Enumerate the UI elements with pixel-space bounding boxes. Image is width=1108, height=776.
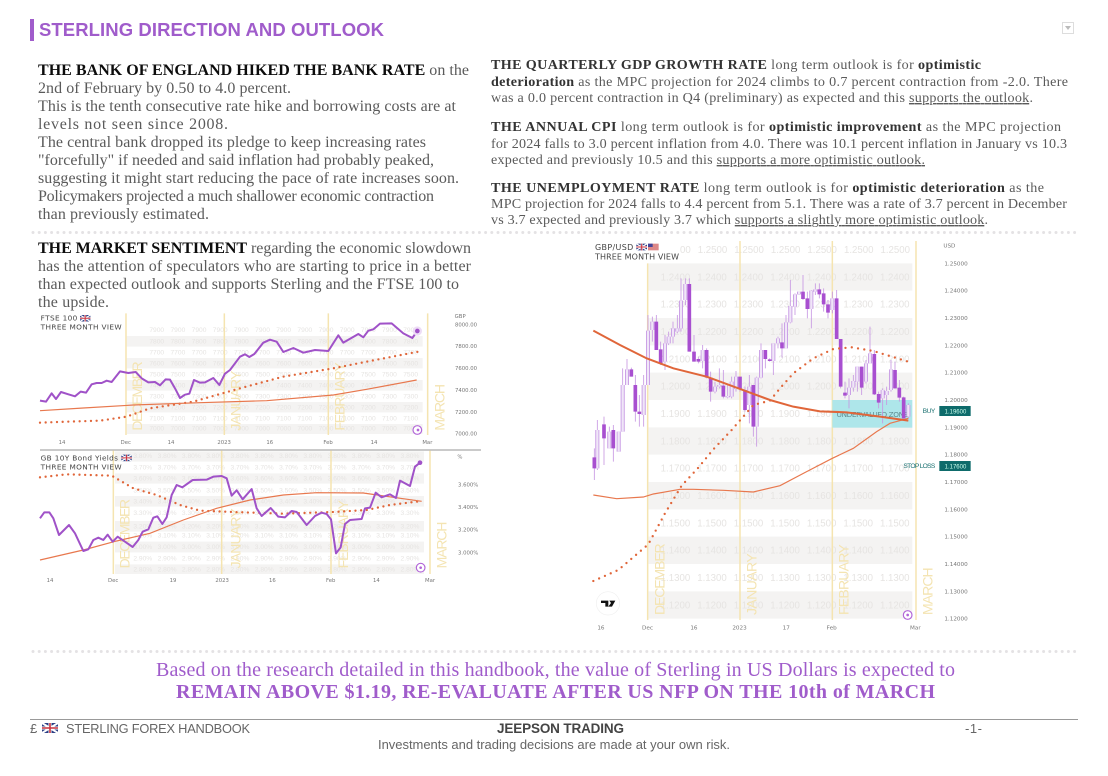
- chart: GB 10Y bond yields: %: [457, 455, 462, 461]
- chart: GBP/USD candlesticks: 1.1700 1.1700 1.1700 1.1700 1.1700 1.1700 1.1700: [661, 464, 910, 475]
- chart: FTSE 100: 14: [59, 440, 66, 446]
- chart: GB 10Y bond yields: 14: [373, 578, 380, 584]
- text block: bank of england: Policymakers projected a much shallower economic contraction: [38, 188, 434, 205]
- text block: bank of england: levels not seen since 2008.: [38, 116, 228, 133]
- chart: GB 10Y bond yields: 3.80% 3.80% 3.80% 3.80% 3.80% 3.80% 3.80% 3.80% 3.80% 3.80% 3.80% 3.80%: [133, 453, 419, 460]
- chart: GBP/USD candlesticks: FEBRUARY: [835, 544, 851, 615]
- chart: GBP/USD candlesticks: Mar: [910, 625, 921, 631]
- chart: FTSE 100: [40, 313, 478, 446]
- chart: GBP/USD candlesticks: 17: [783, 625, 790, 631]
- chart: GB 10Y bond yields: JANUARY: [228, 508, 244, 568]
- chart: GBP/USD candlesticks: 2023: [732, 625, 747, 631]
- chart: FTSE 100: Dec: [121, 440, 131, 446]
- text block: bank of england: than previously estimated.: [38, 206, 209, 223]
- chart: GB 10Y bond yields: 2.80% 2.80% 2.80% 2.80% 2.80% 2.80% 2.80% 2.80% 2.80% 2.80% 2.80% 2.80%: [133, 567, 419, 574]
- chart: GB 10Y bond yields: 3.000%: [458, 551, 478, 557]
- chart: GB 10Y bond yields: 2023: [215, 578, 229, 584]
- undervalued zone: [832, 400, 912, 428]
- chart: GBP/USD candlesticks: 1.2200 1.2200 1.2200 1.2200 1.2200 1.2200 1.2200: [661, 327, 910, 338]
- chart: GB 10Y bond yields: 14: [47, 578, 54, 584]
- chart: FTSE 100: Mar: [422, 440, 433, 446]
- text block: quarterly GDP: deterioration as the MPC projection for 2024 climbs to 0.7 percent contraction from -2.0. There: [491, 74, 1068, 90]
- chart: FTSE 100: FTSE 100: [41, 314, 78, 323]
- chart: FTSE 100: 16: [266, 440, 274, 446]
- text block: annual CPI: [491, 119, 1067, 168]
- chart: GB 10Y bond yields: 2.90% 2.90% 2.90% 2.90% 2.90% 2.90% 2.90% 2.90% 2.90% 2.90% 2.90% 2.90%: [133, 556, 419, 563]
- chart: GBP/USD candlesticks: 1.18000: [944, 453, 968, 459]
- footer: Investments and trading decisions are made at your own risk.: [378, 737, 730, 752]
- buy level: 1.19600: [945, 409, 967, 415]
- moving averages: [593, 331, 908, 581]
- chart: GB 10Y bond yields: 3.20% 3.20% 3.20% 3.20% 3.20% 3.20% 3.20% 3.20% 3.20% 3.20% 3.20% 3.20%: [133, 524, 419, 531]
- chart: GBP/USD candlesticks: USD: [943, 244, 956, 250]
- chart: GBP/USD candlesticks: 1.2000 1.2000 1.2000 1.2000 1.2000 1.2000 1.2000: [661, 382, 910, 393]
- chart: GBP/USD candlesticks: 1.22000: [944, 343, 968, 349]
- chart: GB 10Y bond yields: [40, 451, 478, 584]
- chart: GB 10Y bond yields: 19: [170, 578, 177, 584]
- chart: GB 10Y bond yields: 3.600%: [458, 483, 478, 489]
- candlesticks: [594, 275, 908, 480]
- footer: -1-: [965, 721, 982, 736]
- chart: FTSE 100: 7300 7300 7300 7300 7300 7300 7300 7300 7300 7300 7300 7300 7300: [149, 393, 418, 400]
- text block: unemployment rate: MPC projection for 2024 falls to 4.4 percent from 5.1. There was a rate of 3.7 percent in December: [491, 196, 1067, 212]
- stop loss level: STOP LOSS: [903, 463, 936, 470]
- text block: quarterly GDP: [491, 57, 1068, 106]
- chart: GBP/USD candlesticks: Dec: [642, 625, 653, 631]
- chart: FTSE 100: 7200 7200 7200 7200 7200 7200 7200 7200 7200 7200 7200 7200 7200: [149, 404, 418, 411]
- chart: FTSE 100: JANUARY: [228, 370, 244, 431]
- chart: FTSE 100: 7900 7900 7900 7900 7900 7900 7900 7900 7900 7900 7900 7900 7900: [149, 327, 418, 334]
- chart: GBP/USD candlesticks: 1.21000: [944, 371, 968, 377]
- chart: FTSE 100: 7600 7600 7600 7600 7600 7600 7600 7600 7600 7600 7600 7600 7600: [149, 360, 418, 367]
- chart: GB 10Y bond yields: Feb: [326, 578, 336, 584]
- chart: FTSE 100: 8000.00: [455, 322, 478, 328]
- chart: GBP/USD candlesticks: 1.17000: [944, 480, 968, 486]
- chart: GBP/USD candlesticks: MARCH: [920, 567, 936, 615]
- chart: GBP/USD candlesticks: GBP/USD: [595, 243, 633, 252]
- text block: market sentiment: the upside.: [38, 294, 109, 311]
- chart: GBP/USD candlesticks: 1.19000: [944, 425, 968, 431]
- chart: FTSE 100: 7800 7800 7800 7800 7800 7800 7800 7800 7800 7800 7800 7800 7800: [149, 338, 418, 345]
- chart: GB 10Y bond yields: 3.70% 3.70% 3.70% 3.70% 3.70% 3.70% 3.70% 3.70% 3.70% 3.70% 3.70% 3.70%: [133, 465, 419, 472]
- chart: GBP/USD candlesticks: 1.1600 1.1600 1.1600 1.1600 1.1600 1.1600 1.1600: [661, 491, 910, 502]
- chart: GBP/USD candlesticks: 00 1.2500 1.2500 1.2500 1.2500 1.2500 1.2500: [680, 245, 910, 256]
- text block: bank of england: "forcefully" if needed and said inflation had probably peaked,: [38, 152, 434, 169]
- text block: quarterly GDP: was a 0.0 percent contraction in Q4 (preliminary) as expected and this supports the outlook.: [491, 90, 1033, 106]
- chart: GB 10Y bond yields: FEBRUARY: [335, 499, 351, 568]
- chart: GB 10Y bond yields: 3.200%: [458, 528, 478, 534]
- chart: FTSE 100: 2023: [217, 440, 231, 446]
- chart: GB 10Y bond yields: Mar: [425, 578, 436, 584]
- title: STERLING DIRECTION AND OUTLOOK: [39, 19, 385, 40]
- buy level: BUY: [923, 408, 936, 415]
- chart: GBP/USD candlesticks: 1.1800 1.1800 1.1800 1.1800 1.1800 1.1800 1.1800: [661, 436, 910, 447]
- chart: FTSE 100: 7200.00: [455, 410, 478, 416]
- chart: GB 10Y bond yields: THREE MONTH VIEW: [40, 463, 122, 472]
- chart: GBP/USD candlesticks: 1.23000: [944, 316, 968, 322]
- conclusion callout: Based on the research detailed in this handbook, the value of Sterling in US Dollars is expected to: [156, 659, 955, 681]
- icon: TradingView logo: [596, 592, 620, 615]
- chart: GBP/USD candlesticks: 1.1300 1.1300 1.1300 1.1300 1.1300 1.1300 1.1300: [661, 573, 910, 584]
- chart: GBP/USD candlesticks: THREE MONTH VIEW: [594, 253, 679, 262]
- chart: GBP/USD candlesticks: 1.16000: [944, 507, 968, 513]
- footer: JEEPSON TRADING: [497, 721, 624, 736]
- chart: FTSE 100: 14: [168, 440, 175, 446]
- chart: GBP/USD candlesticks: 1.1400 1.1400 1.1400 1.1400 1.1400 1.1400 1.1400: [661, 546, 910, 557]
- chart: GB 10Y bond yields: 3.10% 3.10% 3.10% 3.10% 3.10% 3.10% 3.10% 3.10% 3.10% 3.10% 3.10% 3.10%: [133, 532, 419, 539]
- text block: unemployment rate: vs 3.7 expected and previously 3.7 which supports a slightly more optimistic outlook.: [491, 212, 988, 228]
- buy level: [923, 406, 971, 416]
- text block: bank of england: THE BANK OF ENGLAND HIKED THE BANK RATE on the: [38, 62, 469, 79]
- footer: STERLING FOREX HANDBOOK: [66, 721, 250, 736]
- chart: GB 10Y bond yields: 3.50% 3.50% 3.50% 3.50% 3.50% 3.50% 3.50% 3.50% 3.50% 3.50% 3.50% 3.50%: [133, 487, 419, 494]
- chart: FTSE 100: THREE MONTH VIEW: [40, 323, 122, 332]
- text block: bank of england: The central bank dropped its pledge to keep increasing rates: [38, 134, 426, 151]
- chart: GB 10Y bond yields: 3.400%: [458, 505, 478, 511]
- text block: market sentiment: THE MARKET SENTIMENT regarding the economic slowdown: [38, 240, 471, 257]
- conclusion callout: [156, 659, 955, 703]
- text block: annual CPI: expected and previously 10.5 and this supports a more optimistic outlook.: [491, 152, 925, 168]
- text block: bank of england: [38, 62, 469, 223]
- chart: GB 10Y bond yields: 3.40% 3.40% 3.40% 3.40% 3.40% 3.40% 3.40% 3.40% 3.40% 3.40% 3.40% 3.40%: [133, 499, 419, 506]
- chart: FTSE 100: 7800.00: [455, 344, 478, 350]
- footer: £: [30, 721, 38, 736]
- chart: GBP/USD candlesticks: 1.20000: [944, 398, 968, 404]
- footer: [30, 721, 982, 752]
- chart: GBP/USD candlesticks: 1.25000: [944, 261, 968, 267]
- text block: unemployment rate: [491, 180, 1067, 228]
- stop loss level: 1.17600: [945, 464, 967, 470]
- chart: FTSE 100: 7100 7100 7100 7100 7100 7100 7100 7100 7100 7100 7100 7100 7100: [149, 415, 418, 422]
- chart: FTSE 100: Feb: [323, 440, 333, 446]
- chart: FTSE 100: GBP: [455, 314, 466, 320]
- chart: GBP/USD candlesticks: [593, 241, 971, 631]
- chart: GB 10Y bond yields: 3.00% 3.00% 3.00% 3.00% 3.00% 3.00% 3.00% 3.00% 3.00% 3.00% 3.00% 3.00%: [133, 544, 419, 551]
- chart: GB 10Y bond yields: Dec: [108, 578, 118, 584]
- text block: quarterly GDP: THE QUARTERLY GDP GROWTH RATE long term outlook is for optimistic: [491, 57, 981, 73]
- chart: FTSE 100: 7600.00: [455, 366, 478, 372]
- chart: FTSE 100: 7700 7700 7700 7700 7700 7700 7700 7700 7700 7700 7700 7700 7700: [149, 349, 418, 356]
- chart: GBP/USD candlesticks: 1.13000: [944, 589, 968, 595]
- stop loss level: [903, 461, 971, 471]
- chart: GB 10Y bond yields: GB 10Y Bond Yields: [41, 454, 118, 463]
- chart: GBP/USD candlesticks: 1.2100 1.2100 1.2100 1.2100 1.2100 1.2100 1.2100: [661, 354, 910, 365]
- chart: GBP/USD candlesticks: 1.24000: [944, 289, 968, 295]
- chart: FTSE 100: 14: [371, 440, 378, 446]
- text block: bank of england: This is the tenth consecutive rate hike and borrowing costs are at: [38, 98, 457, 115]
- chart: GB 10Y bond yields: 3.60% 3.60% 3.60% 3.60% 3.60% 3.60% 3.60% 3.60% 3.60% 3.60% 3.60% 3.60%: [133, 476, 419, 483]
- chart: GBP/USD candlesticks: Feb: [827, 625, 837, 631]
- text block: annual CPI: THE ANNUAL CPI long term outlook is for optimistic improvement as the MPC projection: [491, 119, 1061, 135]
- chart: GBP/USD candlesticks: 1.1200 1.1200 1.1200 1.1200 1.1200 1.1200 1.1200: [661, 600, 910, 611]
- text block: bank of england: 2nd of February by 0.50 to 4.0 percent.: [38, 80, 291, 97]
- text block: annual CPI: for 2024 falls to 3.0 percent inflation from 4.0. There was 10.1 percent inflation in January vs 10.3: [491, 136, 1067, 152]
- chart: FTSE 100: 7500 7500 7500 7500 7500 7500 7500 7500 7500 7500 7500 7500 7500: [149, 371, 418, 378]
- chart: FTSE 100: 7000.00: [455, 432, 478, 438]
- chart: GBP/USD candlesticks: 16: [597, 625, 605, 631]
- chart: FTSE 100: 7400 7400 7400 7400 7400 7400 7400 7400 7400 7400 7400 7400 7400: [149, 382, 418, 389]
- chart: GBP/USD candlesticks: 1.15000: [944, 535, 968, 541]
- chart: FTSE 100: 7400.00: [455, 388, 478, 394]
- chart: GB 10Y bond yields: 16: [269, 578, 276, 584]
- text block: market sentiment: than expected outlook and supports Sterling and the FTSE 100 to: [38, 276, 459, 293]
- text block: unemployment rate: THE UNEMPLOYMENT RATE long term outlook is for optimistic deterioration as the: [491, 180, 1044, 196]
- chart: GBP/USD candlesticks: DECEMBER: [651, 543, 667, 615]
- chart: GB 10Y bond yields: DECEMBER: [117, 499, 133, 568]
- chart: GBP/USD candlesticks: 1.14000: [944, 562, 968, 568]
- chart: GB 10Y bond yields: MARCH: [433, 522, 449, 568]
- chart: FTSE 100: 7000 7000 7000 7000 7000 7000 7000 7000 7000 7000 7000 7000 7000: [149, 426, 418, 433]
- text block: bank of england: suggesting it might start reducing the pace of rate increases soon.: [38, 170, 459, 187]
- icon: menu toggle: [1062, 22, 1074, 34]
- chart: GBP/USD candlesticks: 1.2400 1.2400 1.2400 1.2400 1.2400 1.2400 1.2400: [661, 272, 910, 283]
- chart: GBP/USD candlesticks: JANUARY: [744, 553, 760, 615]
- undervalued zone: UNDERVALUED ZONE: [837, 410, 909, 419]
- text block: market sentiment: has the attention of speculators who are starting to price in a better: [38, 258, 472, 275]
- chart: FTSE 100: MARCH: [432, 384, 448, 431]
- chart: GBP/USD candlesticks: 16: [690, 625, 698, 631]
- chart: GBP/USD candlesticks: 1.2300 1.2300 1.2300 1.2300 1.2300 1.2300 1.2300: [661, 300, 910, 311]
- chart: GBP/USD candlesticks: 1.12000: [944, 617, 968, 623]
- chart: FTSE 100: DECEMBER: [129, 361, 145, 431]
- conclusion callout: REMAIN ABOVE $1.19, RE-EVALUATE AFTER US NFP ON THE 10th of MARCH: [176, 681, 935, 703]
- chart: GB 10Y bond yields: 3.30% 3.30% 3.30% 3.30% 3.30% 3.30% 3.30% 3.30% 3.30% 3.30% 3.30% 3.30%: [133, 510, 419, 517]
- text block: market sentiment: [38, 240, 472, 311]
- chart: FTSE 100: FEBRUARY: [332, 362, 348, 431]
- chart: GBP/USD candlesticks: 1.1900 1.1900 1.1900 1.1900 1.1900 1.1900 1.1900: [661, 409, 910, 420]
- chart: GBP/USD candlesticks: 1.1500 1.1500 1.1500 1.1500 1.1500 1.1500 1.1500: [661, 518, 910, 529]
